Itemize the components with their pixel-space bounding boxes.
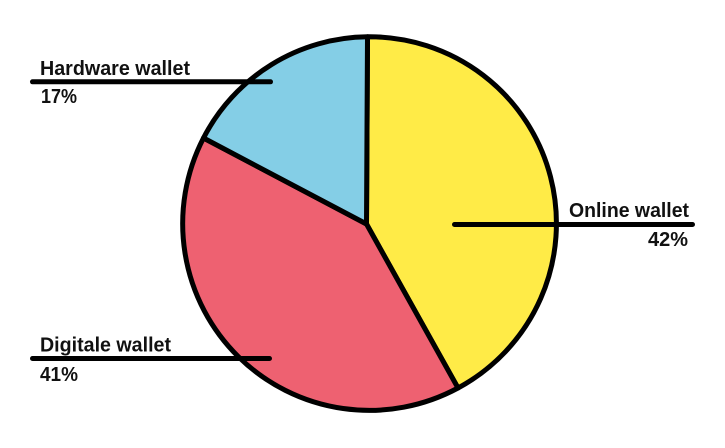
label text: digitale wallet: Digitale wallet <box>40 334 171 356</box>
value: 41%: 41% <box>40 363 78 386</box>
label: online wallet <box>454 199 692 251</box>
leader line: digitale wallet <box>32 356 270 361</box>
slice: hardware wallet 17% <box>204 37 368 224</box>
label text: online wallet: Online wallet <box>569 199 689 222</box>
pie chart <box>183 37 556 410</box>
label: digitale wallet <box>32 334 270 386</box>
label: hardware wallet <box>32 57 270 108</box>
label text: hardware wallet: Hardware wallet <box>40 57 190 80</box>
slice: online wallet 42% <box>366 37 556 388</box>
leader line: online wallet <box>454 222 692 227</box>
value: 17%: 17% <box>41 85 77 108</box>
leader line: hardware wallet <box>32 79 270 84</box>
slice: digitale wallet 41% <box>183 138 458 410</box>
value: 42%: 42% <box>648 228 688 251</box>
